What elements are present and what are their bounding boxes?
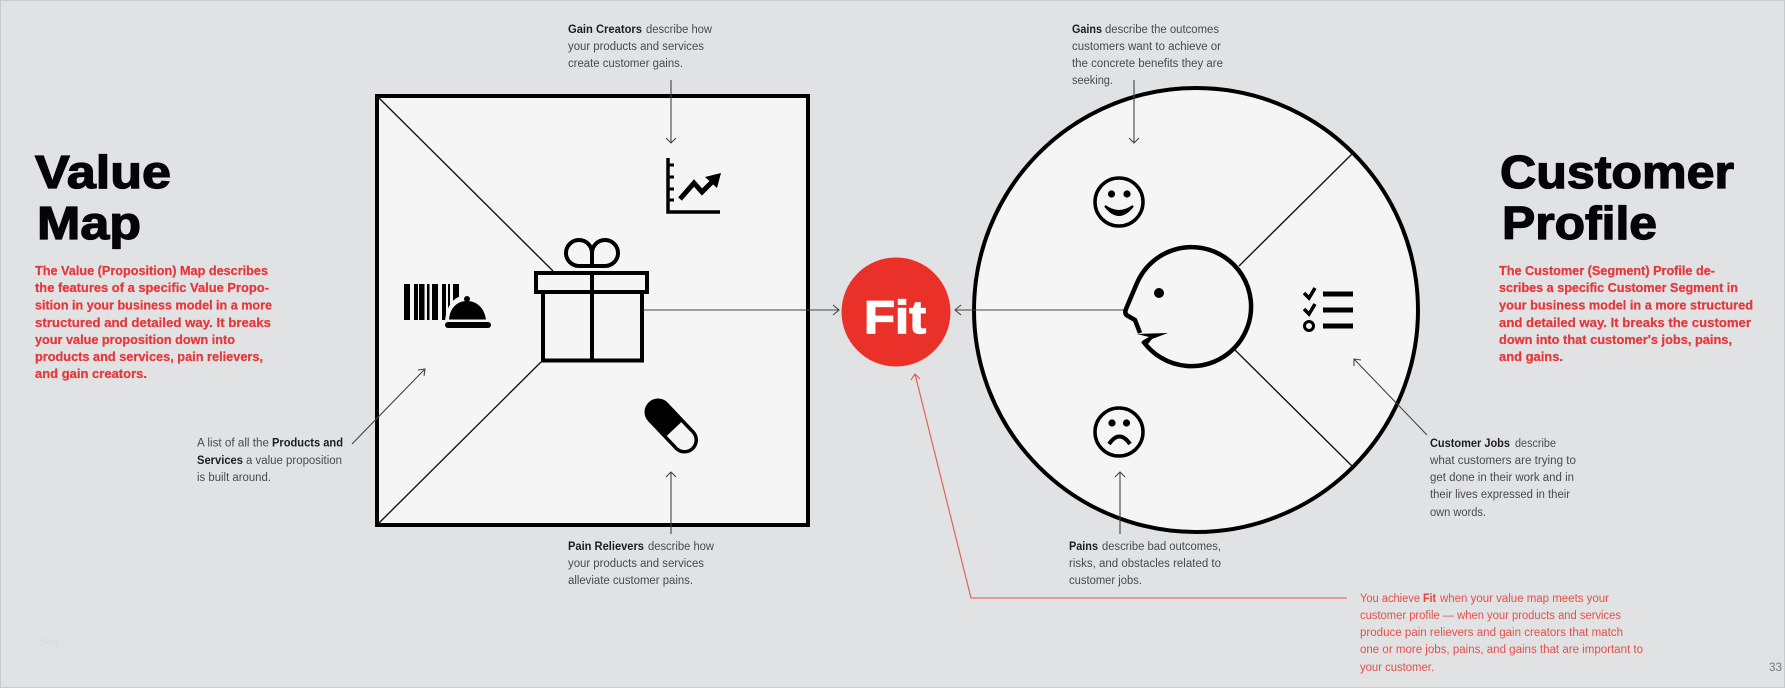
text block: customer profile description: scribes a specific Customer Segment in bbox=[1499, 281, 1738, 295]
arrow: value map to fit bbox=[643, 305, 839, 315]
heading: Value Map: Map bbox=[37, 197, 141, 249]
callout: fit explanation: Fit bbox=[1423, 593, 1436, 605]
text block: gain creators: your products and services bbox=[568, 41, 704, 53]
text block: customer jobs bbox=[1429, 438, 1576, 519]
icon: pill bbox=[658, 412, 694, 450]
text block: customer profile description: down into that customer's jobs, pains, bbox=[1499, 333, 1732, 347]
heading: Customer Profile: Profile bbox=[1502, 197, 1657, 249]
callout: fit explanation: one or more jobs, pains, and gains that are important to bbox=[1360, 644, 1643, 656]
text block: value map description: structured and detailed way. It breaks bbox=[35, 316, 271, 330]
text block: gains: seeking. bbox=[1072, 75, 1113, 87]
callout: fit explanation: your customer. bbox=[1360, 662, 1434, 674]
page number: 33 bbox=[1769, 662, 1782, 674]
arrow: gains bbox=[1129, 80, 1139, 143]
text block: customer jobs: what customers are trying to bbox=[1429, 455, 1576, 467]
text block: value map description: the features of a specific Value Propo- bbox=[35, 281, 269, 295]
arrow: gain creators bbox=[666, 80, 676, 143]
text block: gains: customers want to achieve or bbox=[1072, 41, 1221, 53]
text block: products and services bbox=[197, 438, 343, 484]
icon: gift box bbox=[536, 240, 647, 360]
text block: pains: risks, and obstacles related to bbox=[1069, 558, 1221, 570]
text block: customer profile description: and gains. bbox=[1499, 350, 1563, 364]
text block: value map description: your value proposition down into bbox=[35, 333, 235, 347]
text block: pain relievers: your products and services bbox=[568, 558, 704, 570]
icon: Fit circle bbox=[842, 258, 950, 366]
text block: pain relievers bbox=[568, 541, 715, 587]
text block: customer profile description: and detailed way. It breaks the customer bbox=[1499, 316, 1751, 330]
icon: Fit circle: Fit bbox=[864, 291, 926, 343]
text block: customer profile description bbox=[1499, 264, 1753, 364]
text block: products and services: A list of all the bbox=[197, 438, 269, 450]
text block: customer jobs: own words. bbox=[1430, 507, 1486, 519]
arrow: fit callout bbox=[911, 374, 1347, 598]
text block: customer jobs: get done in their work and in bbox=[1430, 472, 1574, 484]
text block: pains: Pains bbox=[1069, 541, 1098, 553]
text block: value map description: products and services, pain relievers, bbox=[35, 350, 263, 364]
icon: smiling face bbox=[1095, 178, 1143, 226]
text block: customer profile description: The Customer (Segment) Profile de- bbox=[1499, 264, 1715, 278]
callout: fit explanation bbox=[1360, 593, 1643, 674]
icon: checklist bbox=[1304, 288, 1353, 330]
text block: value map description: The Value (Proposition) Map describes bbox=[35, 264, 268, 278]
text block: gain creators: Gain Creators bbox=[568, 24, 642, 36]
text block: gain creators: describe how bbox=[646, 24, 713, 36]
text block: customer jobs: describe bbox=[1515, 438, 1556, 450]
callout: fit explanation: when your value map meets your bbox=[1439, 593, 1609, 605]
panel: customer profile circle bbox=[974, 88, 1418, 532]
text block: customer profile description: your business model in a more structured bbox=[1499, 298, 1753, 312]
icon: frowning face bbox=[1095, 408, 1143, 456]
text block: products and services: a value proposition bbox=[246, 455, 342, 467]
text block: pain relievers: Pain Relievers bbox=[568, 541, 644, 553]
panel: value map square bbox=[377, 96, 808, 525]
heading: Customer Profile: Customer bbox=[1500, 146, 1734, 198]
text block: value map description bbox=[35, 264, 272, 381]
text block: customer jobs: their lives expressed in their bbox=[1430, 489, 1570, 501]
arrow: customer jobs bbox=[1354, 359, 1427, 435]
heading: Value Map bbox=[35, 146, 171, 249]
arrow: customer profile to fit bbox=[955, 305, 1126, 315]
callout: fit explanation: customer profile — when your products and services bbox=[1360, 610, 1621, 622]
text block: pains: describe bad outcomes, bbox=[1102, 541, 1221, 553]
icon: barcode and service bell bbox=[404, 284, 491, 328]
text block: pains: customer jobs. bbox=[1069, 575, 1142, 587]
text block: pains bbox=[1069, 541, 1221, 587]
text block: gains bbox=[1072, 24, 1223, 87]
icon: customer head bbox=[1125, 247, 1251, 366]
text block: customer jobs: Customer Jobs bbox=[1430, 438, 1510, 450]
heading: Value Map: Value bbox=[35, 146, 171, 198]
text block: pain relievers: describe how bbox=[648, 541, 715, 553]
heading: Customer Profile bbox=[1500, 146, 1734, 249]
arrow: products and services bbox=[352, 369, 425, 444]
text block: value map description: sition in your business model in a more bbox=[35, 298, 272, 312]
callout: fit explanation: produce pain relievers and gain creators that match bbox=[1360, 627, 1623, 639]
text block: products and services: Services bbox=[197, 455, 243, 467]
text block: value map description: and gain creators. bbox=[35, 367, 147, 381]
text block: gain creators: create customer gains. bbox=[568, 58, 683, 70]
text block: gains: the concrete benefits they are bbox=[1072, 58, 1223, 70]
arrow: pains bbox=[1115, 472, 1125, 534]
callout: fit explanation: You achieve bbox=[1360, 593, 1420, 605]
text block: products and services: is built around. bbox=[197, 472, 271, 484]
text block: products and services: Products and bbox=[272, 438, 343, 450]
text block: gain creators bbox=[568, 24, 713, 70]
text block: gains: describe the outcomes bbox=[1105, 24, 1219, 36]
text block: pain relievers: alleviate customer pains. bbox=[568, 575, 693, 587]
text block: gains: Gains bbox=[1072, 24, 1102, 36]
faint watermark: blog bbox=[39, 635, 59, 649]
icon: growth chart bbox=[668, 158, 721, 212]
arrow: pain relievers bbox=[666, 472, 676, 534]
